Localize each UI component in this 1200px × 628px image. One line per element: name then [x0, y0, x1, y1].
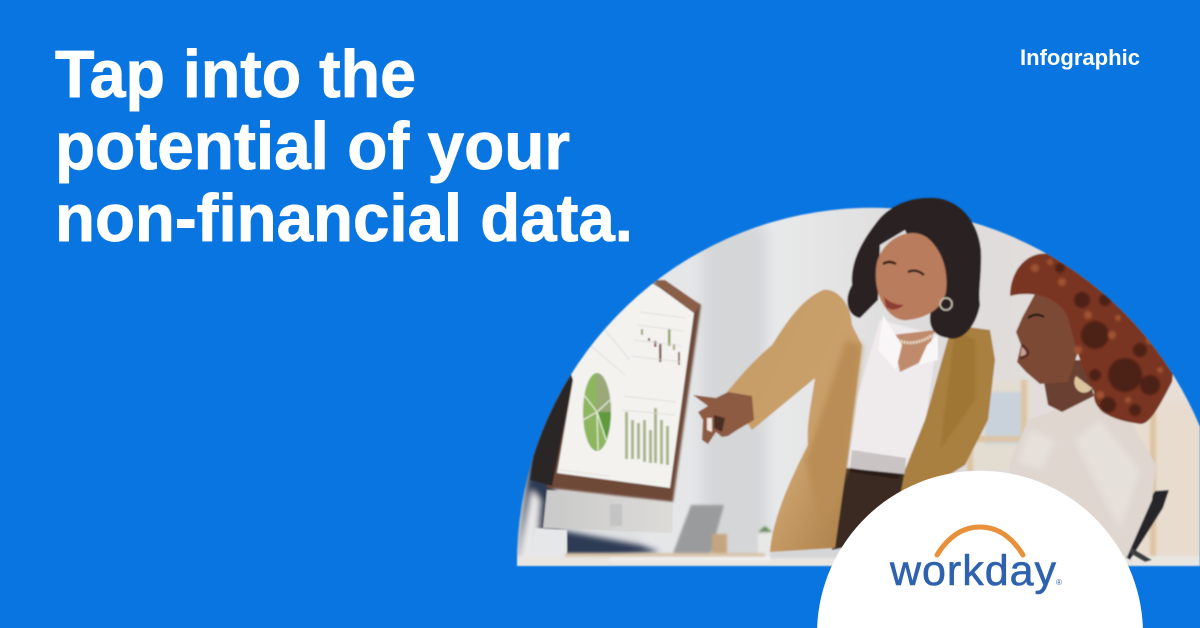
label: Infographic: Infographic [1020, 45, 1140, 70]
office wall [510, 205, 1200, 570]
necklace [890, 335, 933, 343]
screen: lower bar chart [625, 408, 669, 465]
earring [1074, 376, 1092, 393]
woman standing: blazer, shirt and trousers [727, 290, 995, 552]
shirt [848, 320, 938, 472]
registered mark: ® [1056, 578, 1062, 587]
bookshelf [967, 380, 1156, 560]
workday logo [889, 527, 1062, 595]
hoop earrings [940, 298, 952, 310]
monitor stand [543, 490, 673, 533]
woman standing: head and dark hair [847, 198, 981, 339]
blazer right panel [900, 326, 996, 492]
title: Tap into the [55, 37, 416, 112]
chair [1125, 489, 1170, 560]
seated person behind monitor [517, 457, 661, 556]
blouse [1010, 397, 1156, 557]
logo wordmark: workday [889, 547, 1056, 595]
screen: upper bar chart [641, 329, 680, 365]
pointing hand [693, 392, 754, 444]
logo arc [937, 527, 1023, 555]
photo: colleagues reviewing data on a monitor [510, 198, 1200, 570]
curly hair [1010, 253, 1173, 424]
woman seated on right [1010, 253, 1173, 562]
blazer left panel and sleeve [727, 290, 862, 552]
laptop and desk items [517, 505, 1200, 568]
monitor screen [557, 270, 694, 488]
title [55, 37, 633, 256]
monitor [530, 270, 701, 562]
screen: faint chart lines [560, 312, 686, 476]
neck [1040, 360, 1094, 412]
screen: pie chart [583, 373, 611, 451]
shirt collar [878, 315, 938, 370]
face [1016, 290, 1082, 384]
neck and chest [892, 330, 935, 372]
trousers [831, 467, 951, 551]
title: potential of your [55, 109, 570, 184]
title: non-financial data. [55, 181, 633, 256]
belt [850, 468, 900, 479]
logo badge [817, 471, 1143, 628]
